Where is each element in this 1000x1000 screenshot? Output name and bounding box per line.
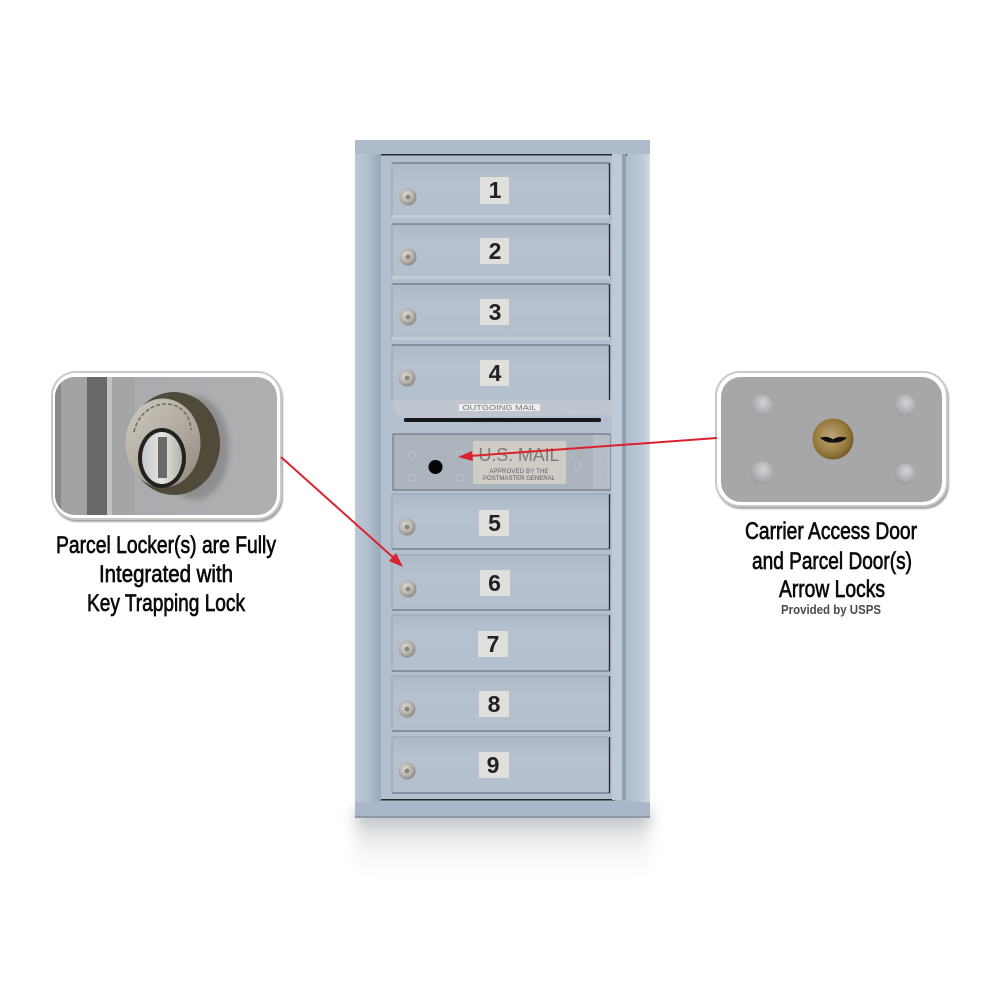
lock housing (128, 392, 220, 495)
door 3 (392, 284, 610, 340)
left caption: Key Trapping Lock (87, 590, 246, 617)
right caption: Arrow Locks (779, 576, 885, 603)
left caption: Integrated with (99, 561, 233, 588)
door 2: 2 (489, 238, 501, 264)
door 4 (392, 345, 610, 401)
right caption: Carrier Access Door (745, 518, 917, 545)
key slot (158, 437, 167, 478)
door 3: 3 (489, 299, 501, 325)
U.S. Mail plate (473, 441, 566, 484)
door 2 (392, 224, 610, 279)
rivets (408, 440, 600, 482)
door 1: 1 (489, 177, 502, 203)
U.S. Mail plate: U.S. MAIL (478, 445, 560, 465)
door 8 (392, 676, 610, 731)
callout image: key trapping lock (52, 372, 283, 522)
outgoing mail slot (393, 400, 612, 422)
door 6 (392, 555, 610, 610)
rivets (750, 395, 916, 484)
carrier access door (393, 434, 610, 490)
left caption: Parcel Locker(s) are Fully (56, 532, 276, 559)
door 5: 5 (488, 510, 501, 536)
door 5 (392, 494, 610, 549)
lock core (138, 428, 186, 488)
right caption (745, 518, 917, 617)
lock face (126, 398, 200, 488)
door 9 (392, 737, 610, 793)
right caption: and Parcel Door(s) (752, 548, 912, 575)
door 7 (392, 615, 610, 671)
door 8: 8 (488, 691, 501, 717)
door 6: 6 (488, 570, 501, 596)
embossed lettering ring (134, 404, 191, 432)
door 7: 7 (487, 631, 499, 657)
mailbox unit (355, 140, 650, 818)
floor shadow (356, 810, 650, 878)
left caption (56, 532, 276, 617)
outgoing mail slot: OUTGOING MAIL (462, 405, 537, 412)
U.S. Mail plate: POSTMASTER GENERAL (483, 476, 556, 482)
arrow: carrier access door lock (458, 438, 717, 461)
U.S. Mail plate: APPROVED BY THE (490, 469, 548, 475)
inner cabinet (378, 154, 628, 800)
arrow: parcel locker lock (281, 457, 403, 567)
callout image: arrow lock (716, 372, 949, 509)
keyhole (428, 460, 442, 474)
outer frame (355, 140, 650, 818)
door 1 (392, 163, 610, 218)
door 9: 9 (487, 752, 499, 778)
door 4: 4 (489, 360, 502, 386)
brass lock (812, 418, 854, 460)
right caption: Provided by USPS (781, 602, 881, 617)
